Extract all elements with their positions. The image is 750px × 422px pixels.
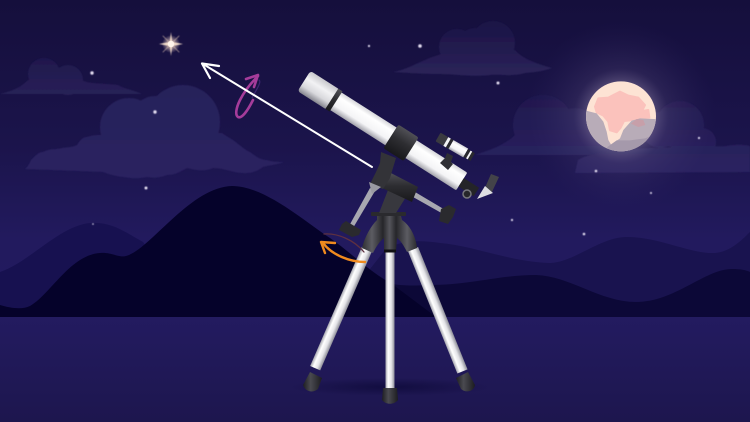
moon cloud overlay — [586, 110, 656, 152]
left slow motion rod — [349, 188, 375, 228]
finder scope — [436, 133, 475, 170]
white pointing arrow — [202, 64, 372, 167]
cloud: behind moon, right — [575, 101, 750, 173]
equatorial mount — [339, 152, 456, 237]
right knob — [439, 205, 456, 224]
back hill left — [0, 223, 200, 320]
tube ring — [325, 89, 342, 112]
cloud: top left — [0, 58, 142, 95]
left knob — [339, 221, 361, 237]
stars — [90, 44, 700, 235]
orange rotation arrow — [321, 234, 365, 262]
moon — [586, 81, 656, 152]
right leg — [408, 247, 468, 373]
cloud: behind moon, left — [475, 95, 620, 155]
moon glow — [526, 21, 716, 211]
ground — [0, 317, 750, 422]
left leg — [310, 247, 372, 370]
tripod — [303, 212, 475, 404]
purple rotation arrow — [236, 75, 260, 117]
tripod head — [362, 216, 417, 253]
rod collar — [369, 182, 381, 194]
main tube — [330, 92, 467, 190]
column — [379, 190, 406, 213]
tube clamp — [383, 125, 419, 161]
telescope tube — [296, 69, 484, 203]
centre foot — [382, 388, 398, 404]
moon surface patch — [595, 92, 649, 132]
focuser knob — [463, 190, 471, 198]
cloud: large centre left — [25, 85, 284, 178]
ground shadow of tripod — [290, 378, 490, 396]
sky background — [0, 0, 750, 320]
right foot — [456, 372, 475, 391]
counter shaft — [382, 172, 418, 202]
mounting plate — [371, 212, 406, 216]
front mountain — [0, 186, 440, 320]
left foot — [303, 372, 322, 392]
focuser — [458, 178, 479, 196]
cloud: top right — [393, 21, 552, 76]
axis block — [370, 152, 396, 189]
dew shield — [298, 71, 340, 110]
front hills right — [340, 269, 750, 320]
centre leg — [386, 251, 394, 389]
bright star — [159, 32, 183, 56]
right slow motion rod — [413, 192, 447, 215]
eyepiece and diagonal — [477, 174, 499, 199]
back hills right — [330, 232, 750, 320]
